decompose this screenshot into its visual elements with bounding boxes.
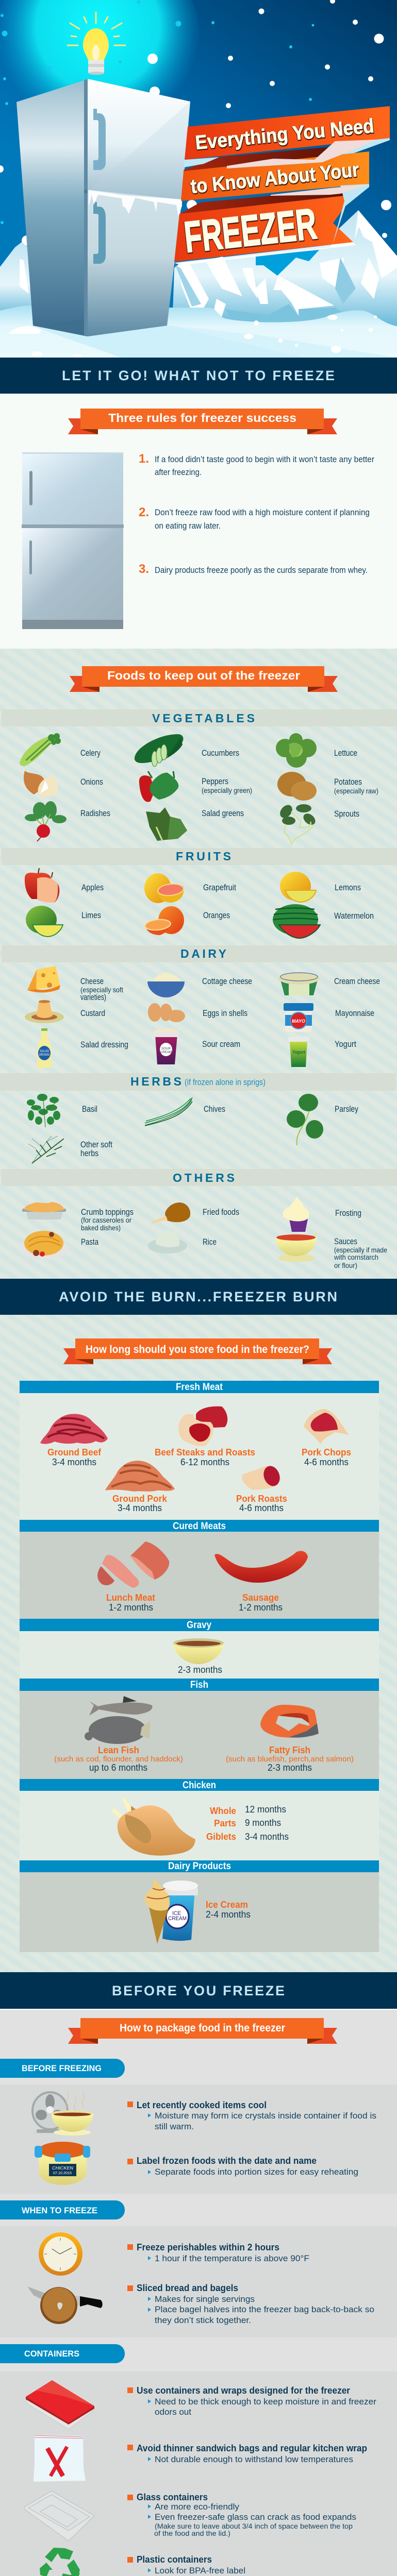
icon: cucumber xyxy=(135,734,184,767)
icon: ice cream: ICE xyxy=(172,1910,181,1917)
icon: grapefruit xyxy=(144,873,184,903)
rule 1: after freezing. xyxy=(155,467,202,477)
icon: apples xyxy=(25,868,59,903)
beef steaks text: 6-12 months xyxy=(180,1457,229,1467)
label: Cucumbers xyxy=(202,748,239,758)
label xyxy=(81,1207,134,1232)
ice cream text: 2-4 months xyxy=(206,1909,251,1920)
header: gravy: Gravy xyxy=(187,1620,211,1631)
label: Cottage cheese xyxy=(202,976,252,986)
header: chicken: Chicken xyxy=(183,1780,216,1791)
rule 3: Dairy products freeze poorly as the curds separate from whey. xyxy=(155,565,368,575)
band: herbs: HERBS xyxy=(130,1075,181,1088)
lunch meat text xyxy=(106,1592,155,1613)
label: (especially if made xyxy=(334,1246,387,1254)
pill: when to freeze: WHEN TO FREEZE xyxy=(22,2206,97,2215)
ground beef text xyxy=(47,1447,102,1467)
band: dairy: DAIRY xyxy=(180,947,226,960)
bullet: avoid thin bags xyxy=(127,2443,367,2464)
lunch meat text: Lunch Meat xyxy=(106,1592,155,1603)
bullet: designed containers: odors out xyxy=(155,2407,191,2417)
label: Oranges xyxy=(203,910,230,920)
bullet: bread and bagels: Place bagel halves into the freezer bag back-to-back so xyxy=(155,2304,374,2314)
icon: sour cream: SOUR xyxy=(161,1047,171,1050)
bullet: avoid thin bags: Avoid thinner sandwich bags and regular kitchen wrap xyxy=(137,2443,367,2453)
ribbon: foods: Foods to keep out of the freezer xyxy=(107,669,300,682)
lean fish text: up to 6 months xyxy=(89,1762,147,1773)
ground pork text xyxy=(112,1494,168,1513)
chicken text: 9 months xyxy=(245,1818,281,1828)
band: herbs: (if frozen alone in sprigs) xyxy=(185,1077,266,1087)
icon: fried chicken xyxy=(152,1202,190,1224)
icon: pork chop xyxy=(304,1409,349,1444)
bullet: glass containers: Even freezer-safe glass can crack as food expands xyxy=(155,2512,356,2522)
panel: foods to keep out of the freezer xyxy=(0,649,397,1279)
icon: cheese xyxy=(27,966,60,993)
band: fruits: FRUITS xyxy=(176,850,231,863)
sausage text xyxy=(239,1592,283,1613)
section heading: before you freeze: BEFORE YOU FREEZE xyxy=(112,1983,285,1998)
band: dairy xyxy=(2,945,397,962)
bullet: perishables xyxy=(127,2242,309,2263)
bullet: plastic containers: Plastic containers xyxy=(137,2554,212,2565)
sausage text: Sausage xyxy=(242,1592,279,1603)
label: Cream cheese xyxy=(334,976,380,986)
icon: pork roast xyxy=(242,1464,283,1490)
ground beef text: 3-4 months xyxy=(52,1457,96,1467)
section heading: avoid the burn xyxy=(0,1279,397,1315)
icon: ice cream xyxy=(145,1878,198,1944)
icon: chicken xyxy=(111,1797,195,1856)
label: Chives xyxy=(204,1104,225,1114)
icon: salad dressing: DRESSING xyxy=(39,1054,49,1057)
label: baked dishes) xyxy=(81,1224,121,1232)
lean fish text: (such as cod, flounder, and haddock) xyxy=(54,1755,183,1764)
label: with cornstarch xyxy=(334,1253,378,1261)
label: Lettuce xyxy=(334,748,357,758)
icon: chives xyxy=(145,1097,192,1126)
label: Sour cream xyxy=(202,1039,240,1049)
label: Crumb toppings xyxy=(81,1207,134,1217)
header: fish: Fish xyxy=(190,1680,208,1690)
rule 1: If a food didn’t taste good to begin with it won’t taste any better xyxy=(155,454,374,464)
label: (especially green) xyxy=(202,786,252,794)
bullet: designed containers xyxy=(127,2385,376,2417)
icon: salad greens xyxy=(146,807,187,841)
icon: clock xyxy=(39,2232,82,2276)
sausage text: 1-2 months xyxy=(239,1602,283,1613)
label: Watermelon xyxy=(334,911,374,921)
ground snow xyxy=(0,306,397,358)
band: vegetables: VEGETABLES xyxy=(152,711,255,725)
icon: celery xyxy=(20,733,61,766)
chicken text: Whole xyxy=(210,1806,236,1816)
bullet: bread and bagels xyxy=(127,2283,374,2325)
bullet: glass containers: Glass containers xyxy=(137,2492,208,2502)
icon: lean fish xyxy=(85,1696,152,1744)
icon: sour cream xyxy=(154,1028,179,1064)
icon: orange xyxy=(144,906,184,935)
band: fruits xyxy=(2,848,397,865)
fatty fish text xyxy=(226,1745,354,1773)
icon: salad dressing: SALAD xyxy=(40,1050,49,1053)
icon: crumb dish xyxy=(22,1202,66,1219)
section heading: let it go xyxy=(0,358,397,394)
icon: potatoes xyxy=(277,772,317,801)
icon: red lid container xyxy=(26,2380,94,2429)
icon: bagel and knife xyxy=(27,2286,103,2324)
label: Frosting xyxy=(335,1208,361,1218)
icon: sour cream: CREAM xyxy=(160,1051,172,1054)
icon: glass container xyxy=(24,2491,94,2541)
icon: parsley xyxy=(287,1094,323,1145)
bullet: plastic containers: Look for BPA-free label xyxy=(155,2566,245,2575)
panel: before freezing items xyxy=(0,2084,397,2194)
icon: cottage cheese xyxy=(147,972,185,997)
pork roasts text xyxy=(236,1494,287,1513)
bullet: let cool: still warm. xyxy=(155,2122,194,2131)
icon: salad dressing xyxy=(37,1028,52,1068)
icon: rice xyxy=(148,1231,187,1253)
icon: frosting xyxy=(283,1196,309,1232)
icon: beef steaks xyxy=(178,1406,227,1446)
icon: ground beef xyxy=(40,1414,108,1444)
ice cream text: Ice Cream xyxy=(206,1900,248,1910)
label: Basil xyxy=(82,1104,97,1114)
label xyxy=(202,776,252,794)
icebergs xyxy=(0,210,397,330)
label: Lemons xyxy=(335,883,361,892)
label: Celery xyxy=(80,748,101,758)
icon: onion xyxy=(24,771,58,796)
bullet: perishables: Freeze perishables within 2 hours xyxy=(137,2242,279,2252)
icon: cream cheese xyxy=(278,972,320,995)
label xyxy=(334,1236,387,1269)
label: Radishes xyxy=(80,808,110,818)
rule 2: Don’t freeze raw food with a high moisture content if planning xyxy=(155,507,370,517)
icon: radish xyxy=(25,801,67,841)
section heading: before you freeze xyxy=(0,1972,397,2010)
panel: how to package food xyxy=(0,2010,397,2576)
icon: lemon xyxy=(280,872,316,902)
icon: sauce bowl xyxy=(275,1232,317,1262)
hero illustration xyxy=(0,0,397,358)
label: Mayonnaise xyxy=(335,1008,374,1018)
label: Custard xyxy=(80,1008,105,1018)
label: Yogurt xyxy=(335,1039,356,1049)
ground pork text: Ground Pork xyxy=(112,1494,168,1504)
rule 2: 2. xyxy=(139,505,149,519)
beef steaks text: Beef Steaks and Roasts xyxy=(155,1447,255,1458)
header: fresh meat: Fresh Meat xyxy=(176,1382,223,1393)
bullet: designed containers: Need to be thick enough to keep moisture in and freezer xyxy=(155,2397,376,2406)
bullet: bread and bagels: Makes for single servings xyxy=(155,2294,255,2304)
bullet: let cool: Let recently cooked items cool xyxy=(137,2100,267,2110)
icon: labelled container: 07.10.2015 xyxy=(53,2172,72,2175)
header: gravy xyxy=(20,1619,379,1631)
lean fish text: Lean Fish xyxy=(98,1745,139,1755)
rule 1 xyxy=(139,452,374,477)
label: (for casseroles or xyxy=(81,1216,131,1224)
label: Sauces xyxy=(334,1236,357,1246)
fatty fish text: (such as bluefish, perch,and salmon) xyxy=(226,1755,354,1764)
bullet: label foods: Separate foods into portion sizes for easy reheating xyxy=(155,2167,358,2177)
ribbon: three rules: Three rules for freezer success xyxy=(108,411,296,425)
ribbon: foods xyxy=(70,666,338,692)
panel: when to freeze items xyxy=(0,2226,397,2337)
label: Grapefruit xyxy=(203,883,236,892)
pill: before freezing xyxy=(0,2059,125,2078)
rule 2: on eating raw later. xyxy=(155,521,221,531)
ribbon: how long xyxy=(63,1338,332,1364)
label: Sprouts xyxy=(334,809,359,819)
icon: gravy bowl xyxy=(173,1638,224,1664)
icon: recycling symbol xyxy=(40,2548,80,2576)
pork roasts text: 4-6 months xyxy=(239,1503,284,1513)
band: vegetables xyxy=(2,709,397,726)
chicken text: Parts xyxy=(214,1818,236,1828)
ground pork text: 3-4 months xyxy=(118,1503,162,1513)
rule 2 xyxy=(139,505,370,531)
icon: light bulb xyxy=(68,12,125,75)
header: dairy products: Dairy Products xyxy=(168,1861,231,1872)
header: cured meats xyxy=(20,1520,379,1532)
title banner: to Know About Your xyxy=(190,159,360,198)
pork chops text: Pork Chops xyxy=(302,1447,351,1458)
panel: three rules xyxy=(0,394,397,649)
label: Salad greens xyxy=(202,808,244,818)
label: Rice xyxy=(203,1237,217,1247)
bullet: let cool: Moisture may form ice crystals inside container if food is xyxy=(155,2111,376,2121)
beef steaks text xyxy=(155,1447,255,1467)
icon: lettuce xyxy=(276,733,317,768)
title banner xyxy=(174,106,390,265)
icon: yogurt: Yogurt xyxy=(292,1049,305,1055)
icon: yogurt xyxy=(288,1037,309,1067)
title banner: Everything You Need xyxy=(194,115,375,154)
bullet: glass containers: of the food and the lid.) xyxy=(154,2529,230,2537)
label: or flour) xyxy=(334,1261,357,1269)
chicken text xyxy=(206,1804,289,1842)
label: Onions xyxy=(80,777,103,787)
lean fish text xyxy=(54,1745,183,1773)
label: Apples xyxy=(81,883,104,892)
section heading: avoid the burn: AVOID THE BURN...FREEZER BURN xyxy=(59,1289,337,1304)
bullet: perishables: 1 hour if the temperature is above 90°F xyxy=(155,2253,309,2263)
icon: lime xyxy=(26,906,63,937)
panel: storage times xyxy=(0,1315,397,1972)
chicken text: 12 months xyxy=(245,1804,286,1815)
icon: ground pork xyxy=(105,1461,175,1492)
section heading: let it go: LET IT GO! WHAT NOT TO FREEZE xyxy=(62,368,335,383)
icon: labelled container xyxy=(35,2142,90,2185)
rule 3: 3. xyxy=(139,562,149,576)
lunch meat text: 1-2 months xyxy=(109,1602,153,1613)
icon: fan and bowl xyxy=(32,2091,93,2136)
ground beef text: Ground Beef xyxy=(47,1447,102,1458)
table backgrounds xyxy=(20,1393,379,1952)
ribbon: how to package xyxy=(68,2018,337,2044)
bullet: bread and bagels: Sliced bread and bagels xyxy=(137,2283,238,2293)
bullet: glass containers: Are more eco-friendly xyxy=(155,2502,239,2512)
bullet: label foods: Label frozen foods with the date and name xyxy=(137,2156,317,2166)
header: dairy products xyxy=(20,1860,379,1872)
label: varieties) xyxy=(80,992,106,1002)
pork chops text xyxy=(302,1447,351,1467)
pork roasts text: Pork Roasts xyxy=(236,1494,287,1504)
label: Fried foods xyxy=(203,1207,239,1217)
icon: custard xyxy=(25,1000,64,1023)
bullet: designed containers: Use containers and wraps designed for the freezer xyxy=(137,2385,350,2396)
label: Cheese xyxy=(80,976,104,986)
label: Eggs in shells xyxy=(203,1008,247,1018)
header: fresh meat xyxy=(20,1381,379,1393)
icon: mayonnaise xyxy=(284,1003,313,1032)
icon: basil xyxy=(27,1094,60,1127)
ribbon: how to package: How to package food in the freezer xyxy=(120,2022,285,2034)
icon: eggs xyxy=(148,1003,185,1022)
icon: lunch meat xyxy=(97,1541,169,1588)
chicken text: 3-4 months xyxy=(245,1832,289,1842)
icon: pasta xyxy=(19,1231,69,1260)
band: others: OTHERS xyxy=(173,1171,235,1184)
icon: fatty fish xyxy=(260,1705,319,1738)
label: Peppers xyxy=(202,776,228,786)
illustration: fridge xyxy=(22,452,124,629)
icon: sausage xyxy=(214,1551,308,1583)
header: cured meats: Cured Meats xyxy=(173,1521,226,1532)
rule 1: 1. xyxy=(139,452,149,466)
gravy text: 2-3 months xyxy=(178,1665,222,1675)
ribbon: three rules xyxy=(68,409,337,434)
pill: before freezing: BEFORE FREEZING xyxy=(22,2063,102,2073)
panel: containers items xyxy=(0,2371,397,2576)
pork chops text: 4-6 months xyxy=(304,1457,349,1467)
bullet: avoid thin bags: Not durable enough to withstand low temperatures xyxy=(155,2454,353,2464)
icon: sprouts xyxy=(277,803,318,844)
band: herbs xyxy=(0,1073,396,1091)
label: herbs xyxy=(80,1148,98,1158)
icon: peppers xyxy=(139,771,178,802)
ice cream text xyxy=(206,1900,251,1920)
label: (especially raw) xyxy=(334,787,378,795)
icon: other soft herbs xyxy=(28,1136,64,1163)
label: Parsley xyxy=(335,1104,358,1114)
label: Potatoes xyxy=(334,777,362,787)
title banner: FREEZER xyxy=(182,199,319,262)
label: Pasta xyxy=(81,1237,98,1247)
fatty fish text: Fatty Fish xyxy=(269,1745,310,1755)
header: chicken xyxy=(20,1779,379,1791)
snowflakes xyxy=(0,0,391,246)
bullet: glass containers xyxy=(127,2492,356,2537)
label xyxy=(80,976,123,1002)
bullet: plastic containers xyxy=(127,2554,355,2576)
bullet: bread and bagels: they don’t stick together. xyxy=(155,2315,251,2325)
bullet: label foods xyxy=(127,2156,358,2177)
label xyxy=(80,1140,112,1158)
icon: crossed sandwich bag xyxy=(34,2435,86,2482)
label: (especially soft xyxy=(80,986,123,994)
label: Limes xyxy=(81,910,101,920)
label xyxy=(334,777,378,795)
bullet: glass containers: (Make sure to leave about 3/4 inch of space between the top xyxy=(155,2522,353,2530)
ribbon: how long: How long should you store food in the freezer? xyxy=(86,1344,309,1355)
rule 3 xyxy=(139,562,368,576)
label: Other soft xyxy=(80,1140,112,1149)
icon: watermelon xyxy=(273,904,320,938)
freezer illustration xyxy=(16,79,190,336)
pill: containers xyxy=(0,2344,125,2363)
icon: ice cream: CREAM xyxy=(168,1916,187,1922)
fatty fish text: 2-3 months xyxy=(268,1762,312,1773)
chicken text: Giblets xyxy=(206,1832,236,1842)
bullet: let cool xyxy=(127,2100,376,2131)
header: fish xyxy=(20,1679,379,1691)
band: others xyxy=(2,1169,397,1186)
icon: mayonnaise: MAYO xyxy=(292,1019,305,1024)
icon: labelled container: CHICKEN xyxy=(52,2166,73,2171)
label: Salad dressing xyxy=(80,1040,128,1049)
pill: when to freeze xyxy=(0,2200,125,2219)
pill: containers: CONTAINERS xyxy=(24,2349,79,2359)
